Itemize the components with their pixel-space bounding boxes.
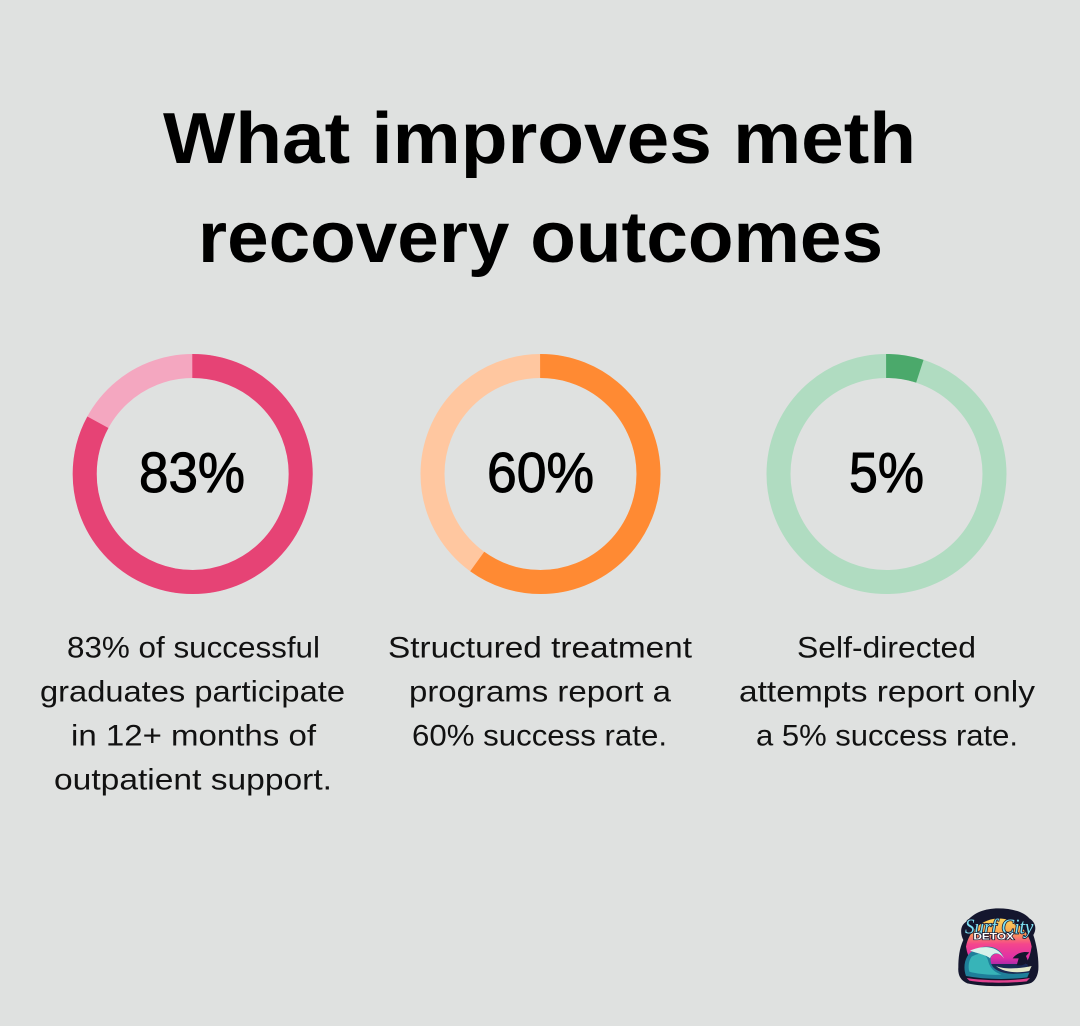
description: 60% (388, 632, 693, 752)
title: recovery outcomes (198, 198, 883, 278)
value: 60%: 60% (487, 441, 594, 505)
donut chart: 5% (778, 366, 994, 582)
value: 83%: 83% (139, 441, 245, 505)
description: 5%: Self-directed (797, 632, 976, 664)
panel: 5% self-directed (739, 366, 1035, 752)
donut chart: 60% (432, 366, 648, 582)
donut chart: 83% (85, 366, 301, 582)
title (163, 99, 916, 278)
icon: Surf City Detox logo (958, 908, 1038, 986)
title: What improves meth (163, 99, 916, 179)
description: 83%: in 12+ months of (71, 720, 317, 752)
description: 60%: 60% success rate. (412, 720, 667, 752)
description: 5% (739, 632, 1035, 752)
description: 5%: a 5% success rate. (756, 720, 1018, 752)
value: 5%: 5% (849, 441, 924, 505)
description: 83%: 83% of successful (67, 632, 320, 664)
description: 83%: graduates participate (40, 676, 345, 708)
description: 60%: programs report a (409, 676, 671, 708)
icon: Surf City Detox logo: DETOX (973, 931, 1014, 941)
icon: Surf City Detox logo: Surf City (965, 916, 1034, 938)
description: 83%: outpatient support. (54, 764, 332, 796)
description: 5%: attempts report only (739, 676, 1035, 708)
description: 83% (40, 632, 345, 796)
description: 60%: Structured treatment (388, 632, 693, 664)
panel: 83% outpatient support (40, 366, 345, 796)
panel: 60% structured treatment (388, 366, 693, 752)
